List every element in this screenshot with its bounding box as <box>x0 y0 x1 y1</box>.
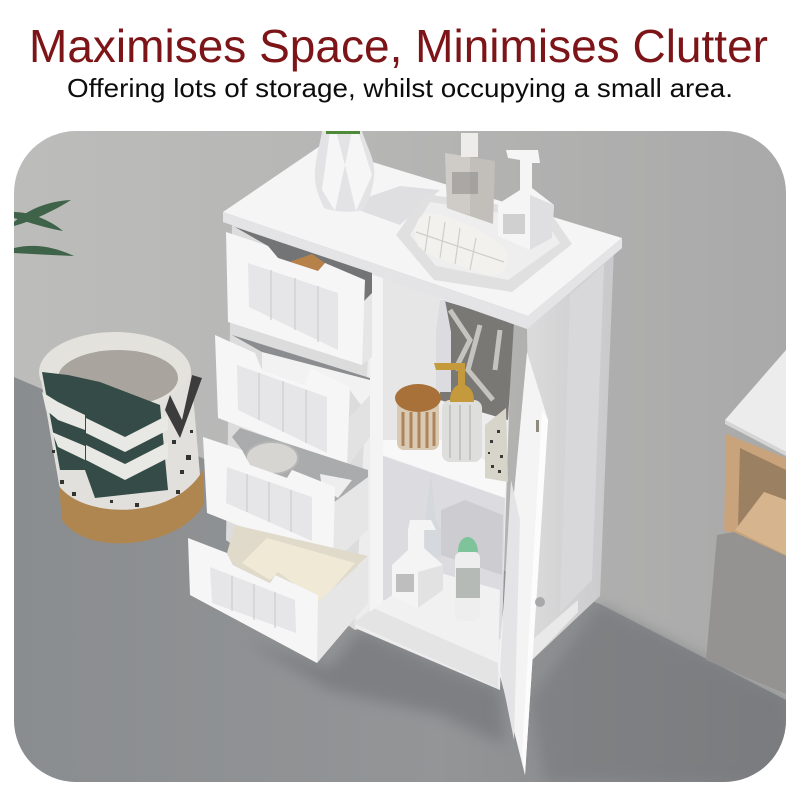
white pump bottle <box>498 150 554 250</box>
spray can <box>455 552 480 584</box>
drawer carcass <box>226 225 375 630</box>
cotton bud jar <box>397 400 439 450</box>
tray <box>396 194 572 292</box>
drawer 1 <box>226 227 372 365</box>
open door <box>498 352 548 775</box>
cabinet top <box>223 146 622 316</box>
wall <box>14 131 786 782</box>
cabinet side panel <box>527 248 614 660</box>
laundry basket <box>39 332 204 543</box>
lower shelf items <box>392 500 503 608</box>
white bottle <box>392 520 443 596</box>
title: Maximises Space, Minimises Clutter <box>29 20 768 72</box>
back wall below shelf <box>383 456 505 640</box>
soap dispenser <box>442 400 482 462</box>
towel <box>416 216 504 270</box>
plant leaves <box>14 200 74 256</box>
interior compartment <box>355 272 512 690</box>
kick plate <box>353 608 498 688</box>
toothbrush lower <box>425 472 441 557</box>
cabinet <box>188 130 622 775</box>
cabinet floor shadow <box>276 632 505 741</box>
drawer 4 <box>188 525 368 663</box>
upper shelf items <box>395 300 508 482</box>
patterned back panel <box>440 300 514 420</box>
photo panel <box>14 130 786 782</box>
cabinet floor panel <box>384 574 500 639</box>
grey pump bottle <box>445 133 495 224</box>
side table <box>706 350 786 694</box>
drawer 3 <box>203 428 368 563</box>
drawer 2 <box>215 335 370 467</box>
upper shelf <box>383 440 507 498</box>
top shadow <box>360 186 440 225</box>
vase <box>315 130 374 212</box>
center divider <box>370 272 383 612</box>
subtitle: Offering lots of storage, whilst occupying a small area. <box>67 73 733 103</box>
terrazzo block <box>485 408 508 482</box>
floor <box>14 377 786 782</box>
toothbrush <box>436 300 451 392</box>
